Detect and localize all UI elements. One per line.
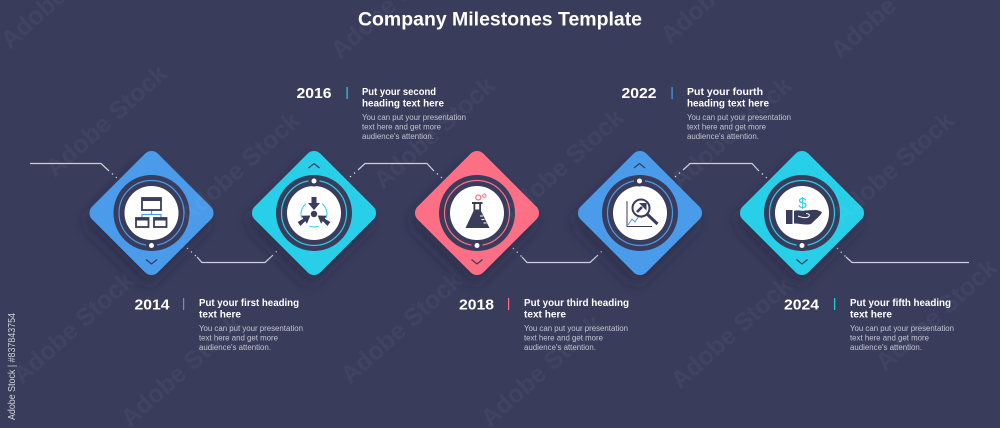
milestone 2 text: Put your second: [362, 86, 436, 98]
milestone 3 text: text here and get more: [524, 334, 604, 342]
milestone 2 text: text here and get more: [362, 122, 442, 132]
milestone 1 diamond: [81, 147, 217, 288]
milestone 4 text: heading text here: [687, 98, 769, 110]
milestone 5 diamond: [732, 147, 868, 288]
stock watermark pattern: Adobe Stock: [335, 266, 468, 389]
stock watermark pattern: Adobe Stock: [665, 71, 798, 194]
milestone 3 text: text here: [524, 308, 566, 320]
connector: fourth to fifth diamond: [675, 164, 768, 179]
icon: hand with dollar: $: [798, 195, 807, 212]
connector: second to third diamond: [350, 164, 443, 179]
stock watermark pattern: Adobe Stock: [173, 106, 306, 229]
milestone 4 text: You can put your presentation: [687, 113, 791, 122]
stock watermark pattern: Adobe Stock: [665, 271, 798, 394]
icon: organisation chart: [136, 198, 166, 227]
stock watermark pattern: Adobe Stock: [40, 59, 173, 182]
milestone 2 text: You can put your presentation: [362, 113, 466, 122]
milestone 2 text: heading text here: [362, 98, 444, 110]
milestone 1 text: 2014: [134, 298, 170, 314]
milestone 5 text: text here and get more: [850, 334, 930, 342]
stock watermark pattern: Adobe Stock: [368, 71, 501, 194]
side stock id label: Adobe Stock | #837843754: [7, 313, 18, 420]
milestone 5 text: [784, 297, 954, 352]
milestone 3 text: 2018: [459, 298, 494, 314]
milestone 3 text: [459, 297, 629, 352]
icon: flask: [466, 194, 490, 228]
milestone 5 text: Put your fifth heading: [850, 297, 951, 309]
milestone 2 text: 2016: [296, 86, 332, 102]
connector: fifth diamond to end: [837, 248, 969, 262]
stock watermark pattern: Adobe Stock: [497, 103, 630, 226]
milestone 4 text: 2022: [622, 86, 656, 102]
milestone 5 text: text here: [850, 308, 892, 320]
milestone 1 text: You can put your presentation: [199, 324, 303, 333]
icon: hand with dollar: [786, 195, 822, 225]
stock watermark pattern: Adobe Stock: [827, 106, 960, 229]
icon: chart with magnifier: [627, 200, 658, 226]
milestone 5 text: audience's attention.: [850, 343, 922, 352]
milestone 3 text: audience's attention.: [524, 343, 596, 352]
milestone 2 diamond: [244, 147, 380, 288]
milestone 1 text: Put your first heading: [199, 297, 299, 309]
milestone 4 text: text here and get more: [687, 122, 767, 132]
milestone 1 text: [134, 297, 303, 352]
milestone 2 text: [296, 86, 466, 141]
milestone 1 text: audience's attention.: [199, 343, 271, 352]
connector: start to first diamond: [30, 164, 118, 179]
milestone 1 text: text here and get more: [199, 334, 279, 342]
milestone 4 text: Put your fourth: [687, 86, 763, 98]
title: Company Milestones Template: [358, 10, 642, 30]
milestone 5 text: You can put your presentation: [850, 324, 954, 333]
milestone 3 diamond: [407, 147, 543, 288]
milestone 5 text: 2024: [784, 298, 819, 314]
stock watermark pattern: Adobe Stock: [870, 253, 1000, 376]
milestone 2 text: audience's attention.: [362, 132, 434, 141]
milestone 1 text: text here: [199, 308, 241, 320]
milestone 3 text: Put your third heading: [524, 297, 629, 309]
milestone 4 text: audience's attention.: [687, 132, 759, 141]
stock watermark pattern: Adobe Stock: [7, 266, 140, 389]
milestone 4 text: [622, 86, 791, 141]
connector: first to second diamond: [187, 248, 279, 262]
icon: converging arrows: [297, 197, 331, 230]
milestone 3 text: You can put your presentation: [524, 324, 628, 333]
connector: third to fourth diamond: [513, 248, 604, 262]
milestone 4 diamond: [570, 147, 706, 288]
